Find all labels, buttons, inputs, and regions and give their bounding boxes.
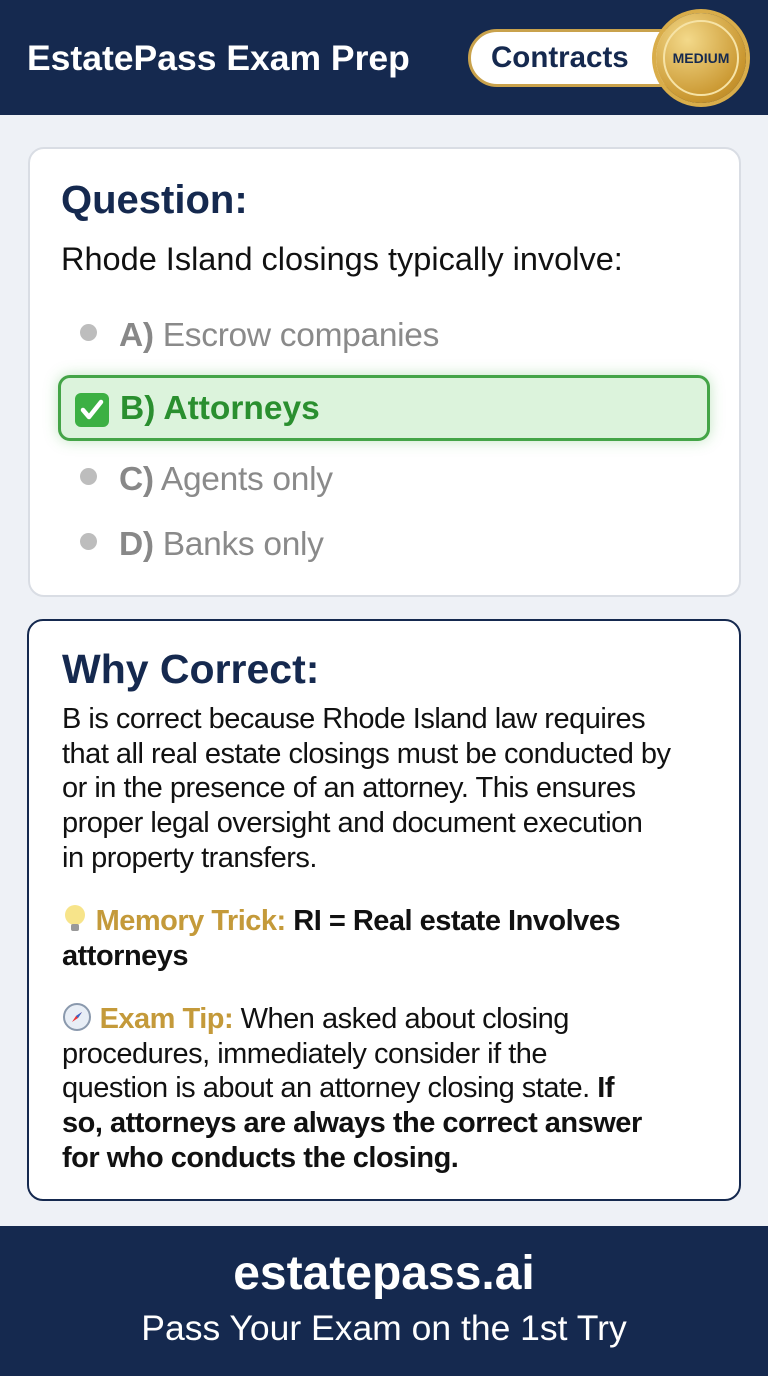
- explanation: proper legal oversight and document execution: [62, 807, 642, 839]
- badge: medium: [656, 13, 746, 103]
- memory trick: attorneys: [62, 940, 188, 972]
- explanation: [62, 703, 671, 874]
- category pill: [468, 29, 696, 87]
- category pill: Contracts: [491, 41, 629, 74]
- option C: C) Agents only: [119, 461, 333, 498]
- explanation: B is correct because Rhode Island law requires: [62, 703, 645, 735]
- panel: question: [28, 147, 741, 597]
- exam tip: [62, 1003, 642, 1174]
- panel: why correct: [27, 619, 741, 1201]
- tagline: Pass Your Exam on the 1st Try: [141, 1308, 627, 1348]
- exam tip: so, attorneys are always the correct answer: [62, 1107, 642, 1139]
- footer brand: estatepass.ai: [233, 1247, 535, 1300]
- question heading: Question:: [61, 178, 248, 222]
- explanation: in property transfers.: [62, 842, 317, 874]
- exam tip: for who conducts the closing.: [62, 1142, 458, 1174]
- exam tip: question is about an attorney closing state. If: [62, 1072, 614, 1104]
- header bar: [0, 0, 768, 115]
- option B correct: [58, 375, 710, 441]
- option A: A) Escrow companies: [119, 317, 439, 354]
- title: EstatePass Exam Prep: [27, 38, 410, 78]
- icon: check: [75, 393, 109, 427]
- memory trick: Memory Trick: RI = Real estate Involves: [96, 905, 620, 937]
- memory trick: [62, 905, 620, 972]
- explanation: that all real estate closings must be conducted by: [62, 738, 671, 770]
- question text: Rhode Island closings typically involve:: [61, 241, 623, 277]
- badge: medium: MEDIUM: [673, 50, 729, 66]
- exam tip: Exam Tip: When asked about closing: [100, 1003, 569, 1035]
- why heading: Why Correct:: [62, 646, 319, 692]
- option D: D) Banks only: [119, 526, 324, 563]
- exam tip: procedures, immediately consider if the: [62, 1038, 547, 1070]
- option B text: B) Attorneys: [120, 390, 320, 427]
- footer: [0, 1226, 768, 1376]
- explanation: or in the presence of an attorney. This ensures: [62, 772, 636, 804]
